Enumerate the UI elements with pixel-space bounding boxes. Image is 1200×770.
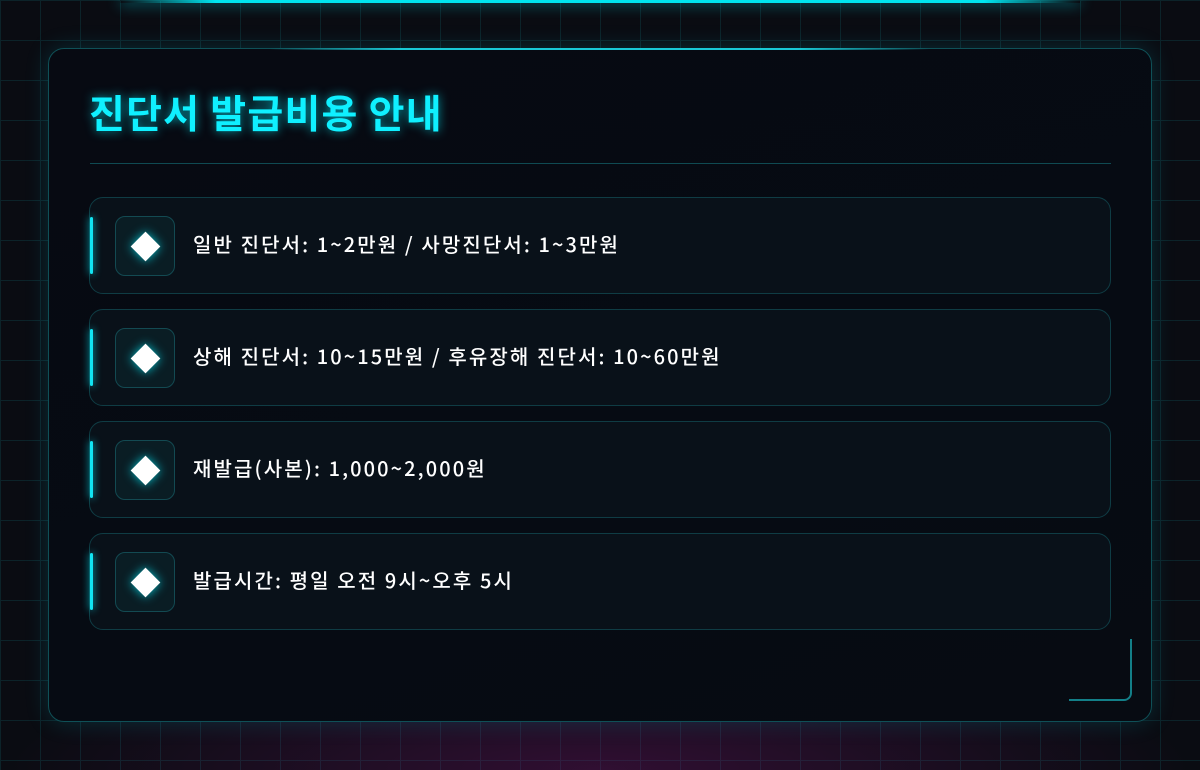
item 1: 일반 진단서: 1~2만원 / 사망진단서: 1~3만원 [193, 229, 620, 258]
item 3 [89, 421, 1111, 518]
item 2: 상해 진단서: 10~15만원 / 후유장해 진단서: 10~60만원 [193, 341, 722, 370]
corner accent [1069, 639, 1132, 701]
top glow bar [120, 0, 1080, 3]
title: 진단서 발급비용 안내 [89, 84, 443, 140]
item 4: 발급시간: 평일 오전 9시~오후 5시 [193, 565, 514, 594]
item 1 [89, 197, 1111, 294]
item 2 [89, 309, 1111, 406]
item 3: 재발급(사본): 1,000~2,000원 [193, 453, 487, 482]
item 4 [89, 533, 1111, 630]
